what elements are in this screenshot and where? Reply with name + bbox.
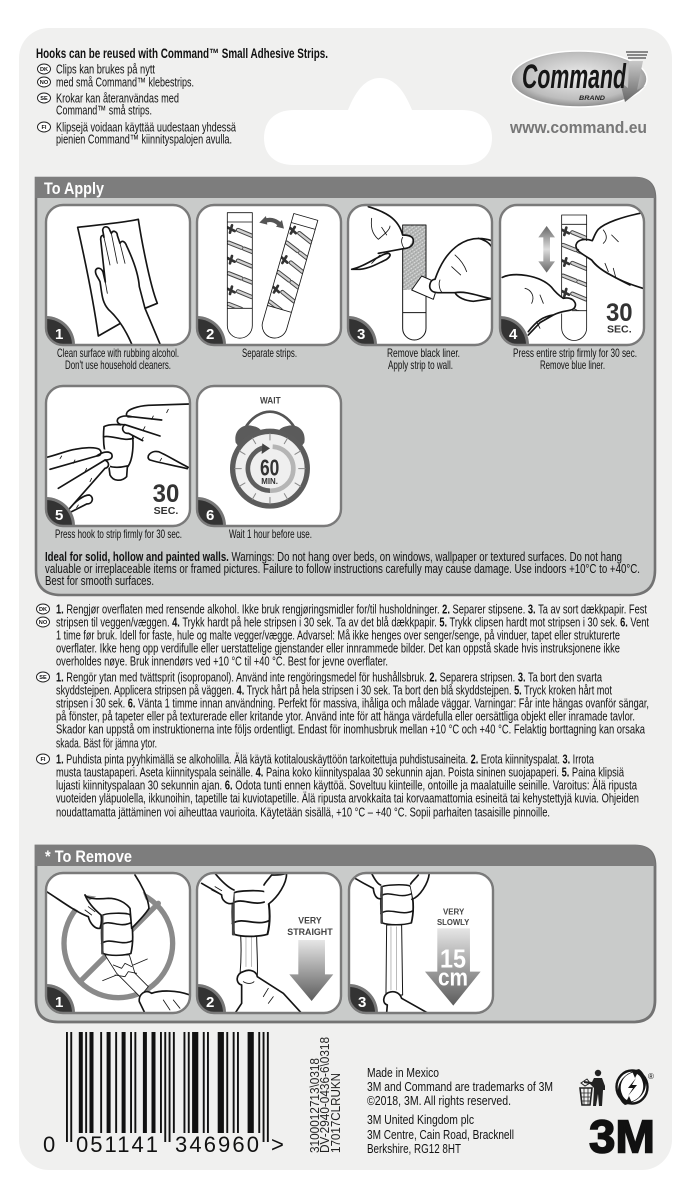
- step 4: 4: [509, 326, 518, 343]
- arrow: very straight: [289, 940, 333, 1001]
- barcode: 346960: [175, 1132, 259, 1157]
- batch codes: 17017CLRUKN: [329, 1073, 343, 1153]
- footer legal text: [367, 1066, 553, 1156]
- remove step 1: 1: [55, 994, 63, 1011]
- arrow: very slowly 15 cm: [425, 928, 481, 1006]
- step 2 caption: Separate strips.: [242, 347, 297, 360]
- arrow: press up and down: [538, 226, 555, 273]
- icon: prohibition sign: [64, 889, 173, 998]
- text block: DK NO instructions: NO: [39, 620, 48, 626]
- icon: alarm clock: [233, 412, 307, 506]
- reuse note: med små Command™ klebestrips.: [56, 76, 194, 90]
- warnings text: Best for smooth surfaces.: [45, 574, 154, 588]
- step 6: [196, 384, 342, 528]
- step 2: [196, 204, 342, 346]
- step 4: SEC.: [607, 325, 632, 336]
- arrow: very slowly 15 cm: cm: [438, 964, 468, 991]
- step 5: SEC.: [154, 506, 179, 517]
- step 1 caption: Clean surface with rubbing alcohol.: [57, 347, 179, 360]
- heading: to remove: * To Remove: [45, 848, 132, 866]
- reuse note: Klipsejä voidaan käyttää uudestaan yhdessä: [56, 120, 236, 134]
- remove step 2: [196, 872, 342, 1014]
- step 3 caption: Remove black liner.: [387, 347, 460, 360]
- hang hole: [264, 78, 492, 165]
- text block: FI instructions: musta taustapaperi. Aseta kiinnityspala seinälle. 4. Paina koko kiinnityspalaa 30 sekunnin ajan. Poista sininen suojapaperi. 5. Paina klipsiä: [56, 766, 624, 780]
- Command logo: [511, 51, 648, 107]
- icon: tidyman: [580, 1070, 605, 1106]
- step 6: 6: [206, 507, 214, 524]
- barcode: 051141: [76, 1132, 158, 1157]
- text block: SE instructions: [36, 670, 649, 750]
- text block: DK NO instructions: [36, 602, 649, 668]
- step 3 caption: [387, 347, 460, 372]
- reuse note: Clips kan brukes på nytt: [56, 62, 155, 76]
- step 1 caption: [57, 347, 179, 372]
- step 1: [44, 204, 192, 346]
- remove step 3: SLOWLY: [437, 918, 470, 927]
- reuse note: DK: [40, 67, 48, 73]
- heading: to remove: [35, 845, 655, 866]
- step 5: [44, 384, 192, 528]
- step 4 caption: [513, 347, 637, 372]
- batch codes: 3100012713\0318: [308, 1058, 322, 1153]
- reuse note: Hooks can be reused with Command™ Small Adhesive Strips.: [36, 46, 328, 61]
- footer legal text: ©2018, 3M. All rights reserved.: [367, 1094, 511, 1108]
- step 5 caption: Press hook to strip firmly for 30 sec.: [55, 528, 182, 541]
- reuse note: SE: [40, 96, 48, 102]
- step 5: 30: [153, 480, 179, 508]
- panel: to remove: [34, 844, 656, 1024]
- icon: alarm clock: 60: [260, 454, 279, 480]
- footer legal text: 3M United Kingdom plc: [367, 1113, 474, 1127]
- remove step 2: 2: [206, 994, 214, 1011]
- reuse note: FI: [42, 125, 47, 131]
- text block: FI instructions: 1. Puhdista pinta pyyhkimällä se alkoholilla. Älä käytä kotitalouskäyttöön tarkoitettuja puhdistusaineita. 2. Erota kiinnityspalat. 3. Irrota: [56, 752, 594, 766]
- Command logo: BRAND: [579, 95, 605, 102]
- step 3 caption: Apply strip to wall.: [388, 359, 453, 372]
- batch codes: DV-2940-0436-6\0318: [318, 1037, 332, 1153]
- reuse note: NO: [40, 80, 49, 86]
- step 1: 1: [55, 326, 63, 343]
- batch codes: [308, 1037, 343, 1153]
- remove step 3: [348, 872, 494, 1014]
- website: www.command.eu: [509, 119, 647, 137]
- reuse note: Command™ små strips.: [56, 104, 152, 118]
- text block: SE instructions: skada. Bäst för jämna ytor.: [56, 736, 157, 750]
- text block: SE instructions: SE: [39, 675, 47, 681]
- barcode: >: [271, 1132, 284, 1157]
- text block: DK NO instructions: overholdes nøye. Bruk innendørs ved +10 °C til +40 °C. Best for jevne overflater.: [56, 654, 388, 668]
- text block: FI instructions: FI: [41, 757, 46, 763]
- Command logo: Command: [522, 58, 627, 96]
- remove step 2: VERY: [298, 916, 322, 926]
- heading: to apply: To Apply: [44, 180, 105, 198]
- footer legal text: 3M and Command are trademarks of 3M: [367, 1080, 553, 1094]
- step 1 caption: Don't use household cleaners.: [65, 359, 171, 372]
- text block: SE instructions: skyddstejpen. Applicera stripsen på väggen. 4. Tryck hårt på hela stripsen i 30 sek. Ta bort den blå skyddstejpen. 5. Tryck kroken hårt mot: [56, 684, 612, 698]
- remove step 2: STRAIGHT: [287, 927, 333, 937]
- icon: green dot: ®: [648, 1072, 654, 1081]
- panel: to apply: [17, 177, 655, 595]
- footer legal text: Berkshire, RG12 8HT: [367, 1142, 461, 1156]
- step 3: [346, 204, 494, 346]
- step 6: WAIT: [260, 395, 281, 405]
- footer legal text: 3M Centre, Cain Road, Bracknell: [367, 1128, 514, 1142]
- barcode: 0: [43, 1132, 55, 1157]
- remove step 1: [44, 872, 192, 1014]
- step 4 caption: Press entire strip firmly for 30 sec.: [513, 347, 637, 360]
- reuse note: pienien Command™ kiinnityspalojen avulla.: [56, 132, 232, 146]
- step 2: 2: [206, 326, 214, 343]
- step 5: 5: [55, 507, 63, 524]
- step 4: [498, 204, 646, 346]
- logo: 3M: 3M: [589, 1110, 655, 1162]
- warnings text: [45, 550, 640, 588]
- barcode: [43, 1032, 284, 1157]
- footer legal text: Made in Mexico: [367, 1066, 439, 1080]
- heading: to apply: [35, 177, 655, 198]
- reuse note: Krokar kan återanvändas med: [56, 92, 179, 106]
- step 6 caption: Wait 1 hour before use.: [229, 528, 312, 541]
- text block: DK NO instructions: stripsen til veggen/væggen. 4. Trykk hardt på hele stripsen i 30 sek. Ta av det blå dækkpapir. 5. Trykk clipsen hardt mot stripsen i 30 sek. 6. Vent: [56, 616, 649, 630]
- step 4 caption: Remove blue liner.: [540, 359, 605, 372]
- remove step 3: VERY: [443, 908, 465, 917]
- text block: DK NO instructions: DK: [39, 607, 47, 613]
- arrow: very slowly 15 cm: 15: [440, 943, 466, 973]
- text block: DK NO instructions: 1. Rengjør overflaten med rensende alkohol. Ikke bruk rengjøringsmidler for/til husholdninger. 2. Separer stipsene. 3. Ta av sort dækkpapir. Fest: [56, 602, 647, 616]
- step 3: 3: [357, 326, 365, 343]
- text block: FI instructions: [36, 752, 639, 820]
- text block: SE instructions: 1. Rengör ytan med tvättsprit (isopropanol). Använd inte rengöringsmedel för hushållsbruk. 2. Separera stripsen. 3. Ta bort den svarta: [56, 670, 602, 684]
- step 4: 30: [606, 299, 633, 327]
- icon: green dot: [616, 1069, 654, 1105]
- reuse note: [36, 46, 328, 146]
- icon: alarm clock: MIN.: [261, 476, 278, 486]
- remove step 3: 3: [358, 994, 366, 1011]
